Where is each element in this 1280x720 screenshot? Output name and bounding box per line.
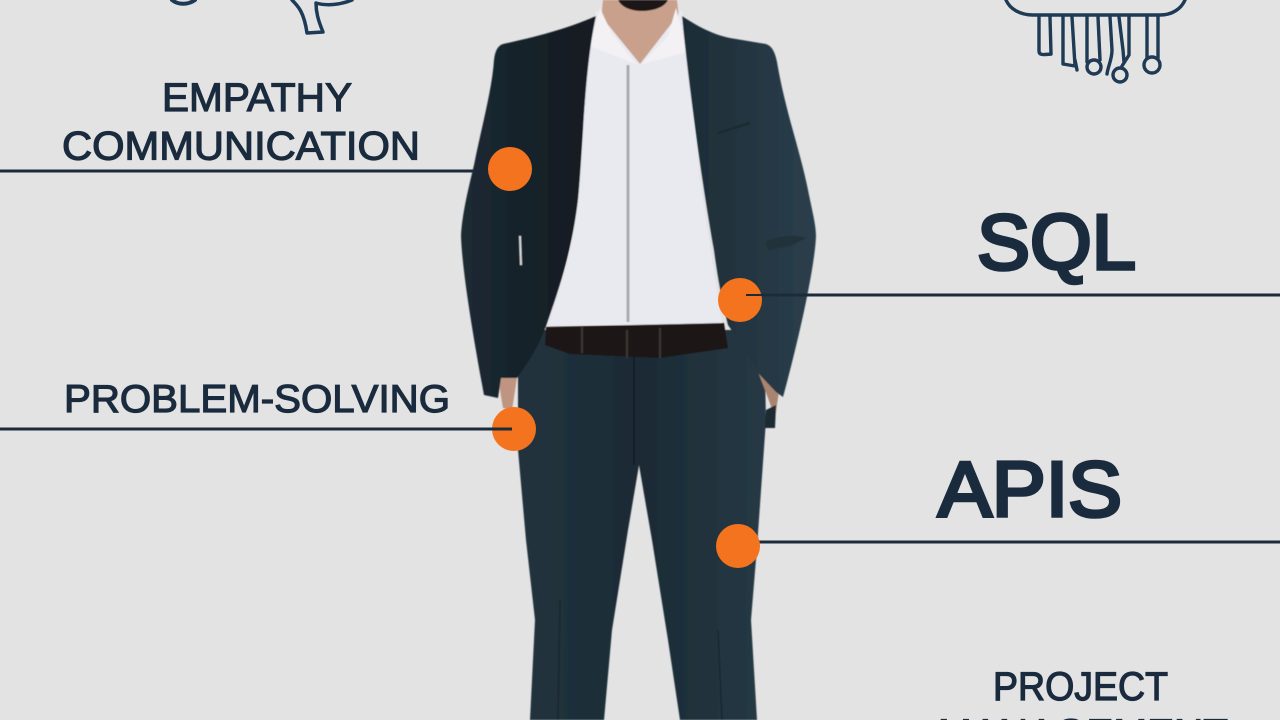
belt [545, 323, 728, 358]
orange marker [488, 147, 532, 191]
label: APIs: APIS [938, 445, 1122, 533]
callout: project management, cropped at bottom [938, 665, 1228, 720]
orange marker [492, 407, 536, 451]
leader line [745, 294, 1280, 296]
callout: APIs [716, 445, 1280, 568]
neck [600, 0, 680, 64]
jacket left side [461, 16, 596, 398]
callout: SQL [718, 198, 1280, 322]
orange marker [716, 524, 760, 568]
icon: cloud with circuit connectors, cropped at top [1006, 0, 1185, 82]
jacket right side [682, 16, 816, 397]
shirt collar [590, 8, 687, 64]
label: SQL: SQL [977, 198, 1136, 286]
label: empathy: EMPATHY [162, 76, 352, 120]
trousers [518, 330, 766, 720]
label: project: PROJECT [993, 665, 1168, 709]
label: problem-solving: PROBLEM-SOLVING [64, 378, 450, 421]
callout: problem-solving [0, 378, 536, 451]
leader line [758, 540, 1280, 544]
label: communication: COMMUNICATION [62, 124, 420, 168]
leader line [0, 428, 512, 430]
person in dark suit [461, 0, 816, 720]
icon: brain outline, cropped at top [172, 0, 352, 33]
left hand [498, 378, 517, 410]
right hand [758, 372, 780, 418]
callout: empathy and communication [0, 76, 532, 191]
leader line [0, 170, 475, 172]
beard [618, 0, 668, 11]
shirt [548, 10, 722, 325]
orange marker [718, 278, 762, 322]
inner leader segment [746, 294, 762, 296]
